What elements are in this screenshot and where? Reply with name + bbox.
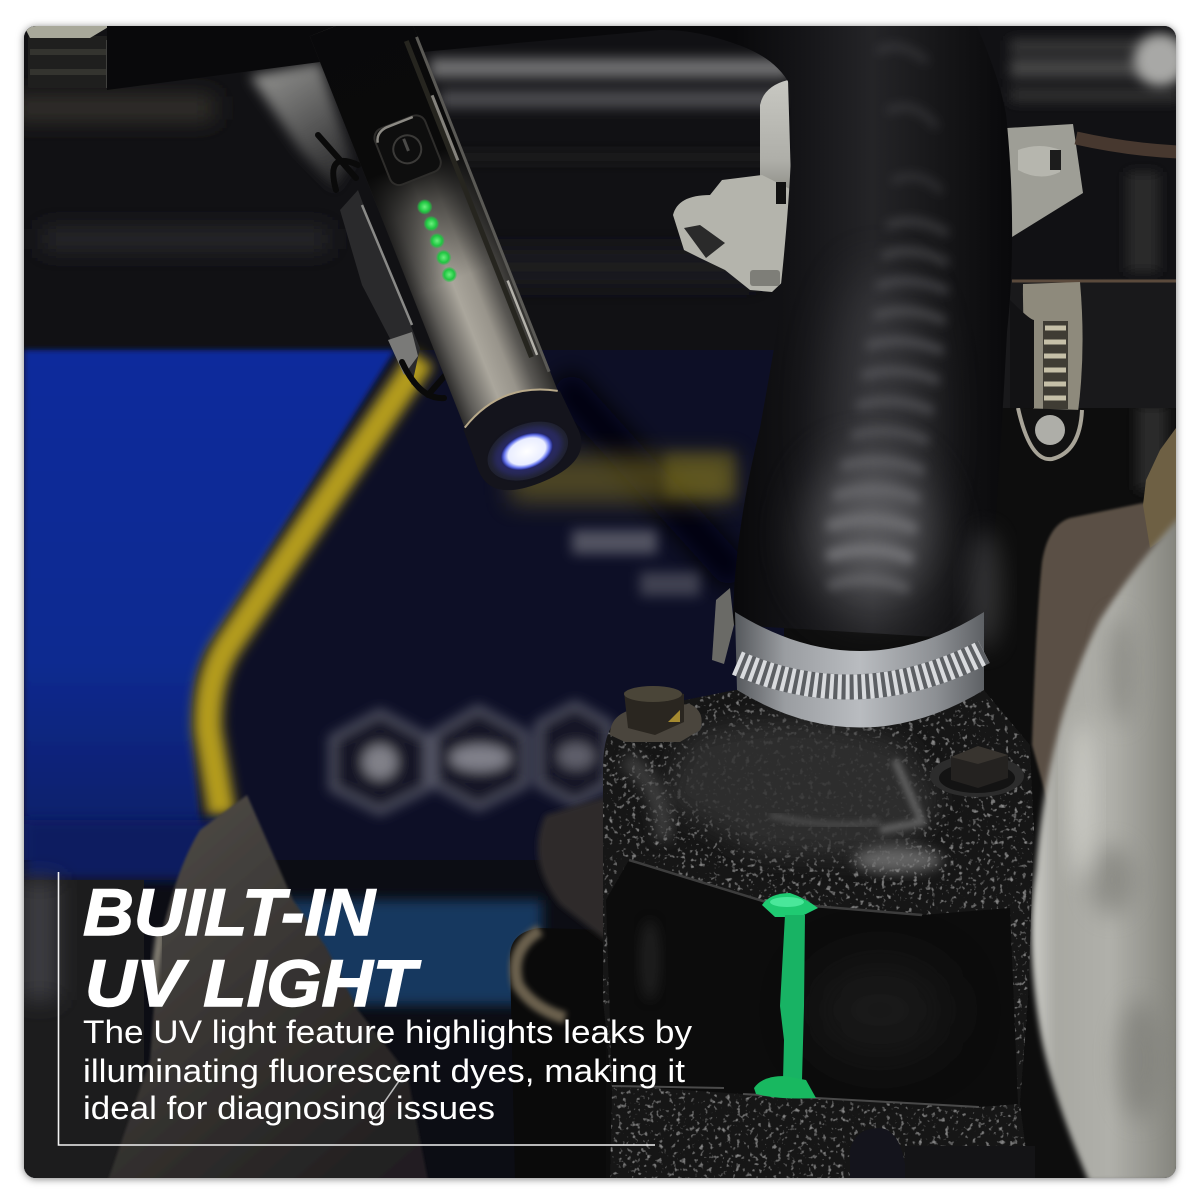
flashlight head and UV lens	[464, 388, 580, 490]
green fluorescent dye streak	[754, 893, 818, 1098]
blurred hexagon icons	[332, 704, 610, 812]
engine block casting	[603, 690, 1035, 1182]
right side hose with clamp	[1000, 279, 1176, 459]
description text	[83, 1014, 692, 1126]
dark fan blade	[108, 795, 428, 1180]
hex bolts	[610, 686, 1024, 797]
description text: ideal for diagnosing issues	[83, 1090, 495, 1126]
metal brackets	[24, 26, 1180, 292]
silver rounded housing	[1031, 516, 1180, 1182]
black radiator hose	[107, 26, 1012, 650]
description text: illuminating fluorescent dyes, making it	[83, 1053, 685, 1089]
description text: The UV light feature highlights leaks by	[83, 1014, 692, 1050]
hose clamp band	[712, 588, 984, 728]
title: UV LIGHT	[85, 946, 421, 1020]
pocket clip	[318, 135, 462, 398]
battery level LEDs	[417, 200, 457, 282]
title	[83, 875, 421, 1020]
power button	[374, 114, 442, 186]
tan housing and brass nut	[1032, 428, 1176, 810]
lower background	[20, 795, 612, 1180]
UV flashlight	[310, 26, 580, 490]
scratch detail	[372, 1068, 408, 1120]
title: BUILT-IN	[83, 875, 376, 949]
blue machine panel with yellow stripe	[24, 350, 784, 910]
blurred background machinery	[10, 26, 1186, 490]
text frame lines	[58, 872, 655, 1145]
